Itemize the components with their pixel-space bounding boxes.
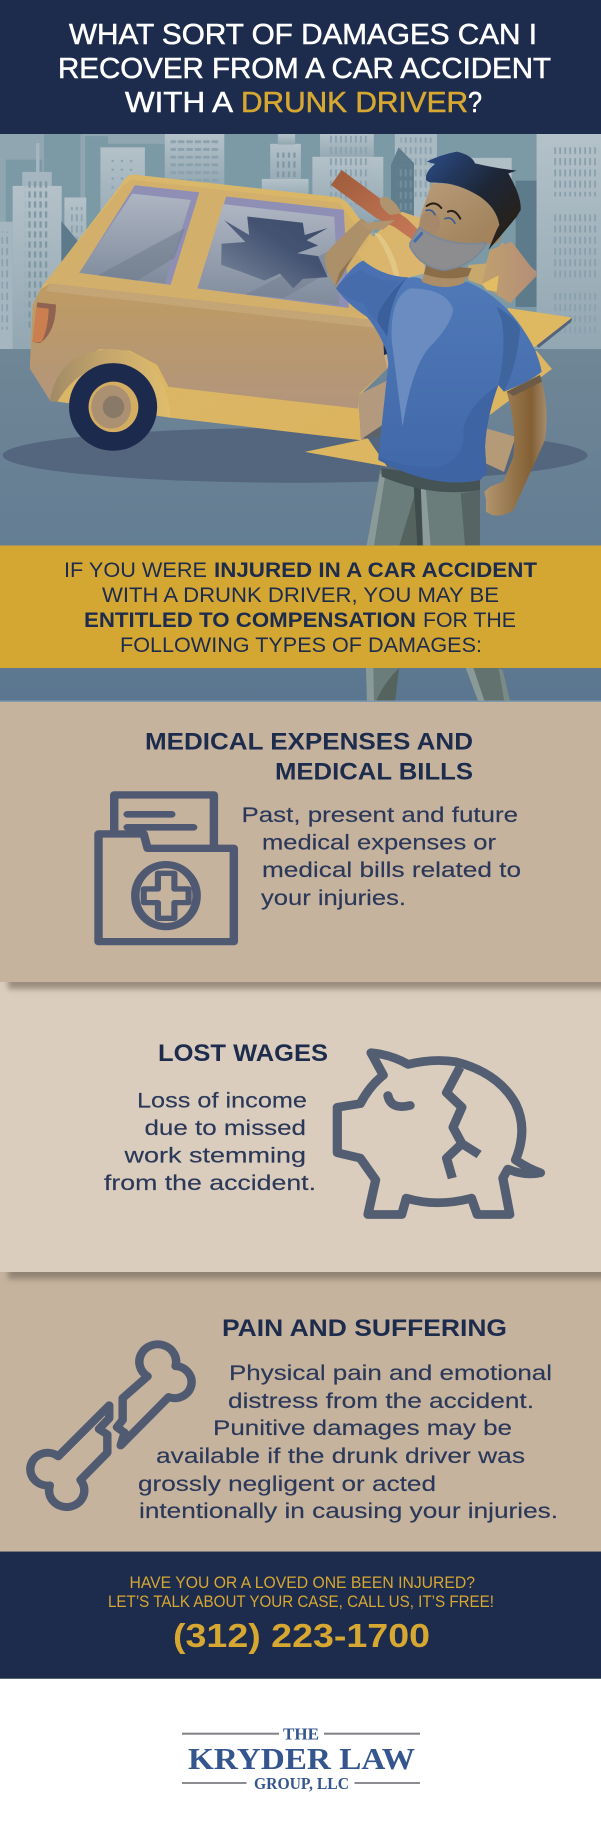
heading: medical expenses: MEDICAL BILLS [275, 758, 473, 786]
panel: lost wages [0, 976, 601, 1272]
text: lost wages: work stemming [123, 1144, 306, 1168]
text: lost wages: Loss of income [137, 1090, 307, 1112]
title: RECOVER FROM A CAR ACCIDENT [58, 53, 551, 85]
text: pain and suffering: available if the drunk driver was [156, 1445, 525, 1468]
car body [30, 174, 399, 451]
heading: pain and suffering: PAIN AND SUFFERING [222, 1315, 507, 1342]
text: lost wages [104, 1090, 316, 1195]
heading: medical expenses [145, 728, 473, 786]
logo: The Kryder Law Group, LLC [182, 1724, 420, 1793]
neck [422, 263, 472, 287]
crumpled car front pieces [305, 242, 572, 472]
logo: The Kryder Law Group, LLC: THE [283, 1724, 319, 1744]
icon: cracked piggy bank [337, 1053, 540, 1215]
text: pain and suffering: Punitive damages may be [213, 1417, 512, 1440]
text: medical expenses: your injuries. [261, 887, 406, 910]
text: pain and suffering: grossly negligent or acted [138, 1473, 436, 1496]
ear [482, 224, 501, 244]
intro text: ENTITLED TO COMPENSATION [84, 609, 416, 632]
text: lost wages: due to missed [144, 1117, 306, 1140]
text: pain and suffering: intentionally in causing your injuries. [139, 1500, 558, 1523]
intro text: IF YOU WERE [64, 559, 207, 582]
car wheel [50, 349, 158, 451]
panel: medical expenses [0, 700, 601, 982]
icon: broken bone [30, 1344, 192, 1507]
intro text: WITH A DRUNK DRIVER, YOU MAY BE [102, 584, 499, 607]
bottle [331, 170, 422, 242]
heading: medical expenses: MEDICAL EXPENSES AND [145, 728, 473, 756]
text: lost wages: from the accident. [104, 1172, 316, 1195]
city skyline [0, 134, 601, 352]
text: pain and suffering [138, 1362, 558, 1523]
hair [426, 152, 521, 250]
logo: The Kryder Law Group, LLC: KRYDER LAW [188, 1741, 415, 1776]
heading: lost wages: LOST WAGES [158, 1040, 328, 1067]
trousers [366, 468, 511, 703]
title: WITH A [125, 87, 234, 119]
beard [410, 227, 487, 270]
gold intro band [0, 546, 601, 668]
illustration: city street and crashed car [0, 134, 601, 703]
right arm [484, 375, 547, 516]
text: medical expenses [242, 804, 521, 910]
car tail light [33, 302, 56, 343]
icon: medical folder [99, 795, 234, 942]
text: medical expenses: medical expenses or [262, 832, 496, 854]
intro text: FOLLOWING TYPES OF DAMAGES: [120, 634, 482, 657]
title [58, 19, 551, 119]
intro text: INJURED IN A CAR ACCIDENT [214, 559, 537, 582]
text: pain and suffering: distress from the accident. [228, 1390, 534, 1413]
title: WHAT SORT OF DAMAGES CAN I [69, 19, 537, 51]
footer call to action [0, 1551, 601, 1679]
intro text: FOR THE [423, 609, 516, 632]
t-shirt [336, 261, 542, 482]
panel: pain and suffering [0, 1266, 601, 1552]
title: DRUNK DRIVER [241, 87, 468, 119]
phone number: (312) 223-1700 [173, 1617, 430, 1654]
text: pain and suffering: Physical pain and emotional [229, 1362, 552, 1385]
head [410, 152, 521, 270]
rear window [79, 185, 199, 285]
text: medical expenses: Past, present and future [242, 804, 518, 827]
eyes and brows [426, 203, 460, 223]
car hood behind the man [357, 212, 537, 355]
call to action text [108, 1573, 494, 1611]
shattered front window [197, 196, 349, 308]
hand [362, 197, 402, 230]
title: ? [468, 87, 482, 119]
intro text [64, 559, 537, 657]
man drinking from a bottle [325, 152, 547, 703]
raised arm [325, 218, 375, 287]
bottle mouth [415, 233, 422, 241]
call to action text: HAVE YOU OR A LOVED ONE BEEN INJURED? [130, 1573, 475, 1592]
header band [0, 0, 601, 134]
text: medical expenses: medical bills related to [262, 859, 521, 882]
logo: The Kryder Law Group, LLC: GROUP, LLC [254, 1774, 349, 1793]
street and car shadow [0, 349, 601, 703]
call to action text: LET’S TALK ABOUT YOUR CASE, CALL US, IT’S FREE! [108, 1592, 494, 1611]
